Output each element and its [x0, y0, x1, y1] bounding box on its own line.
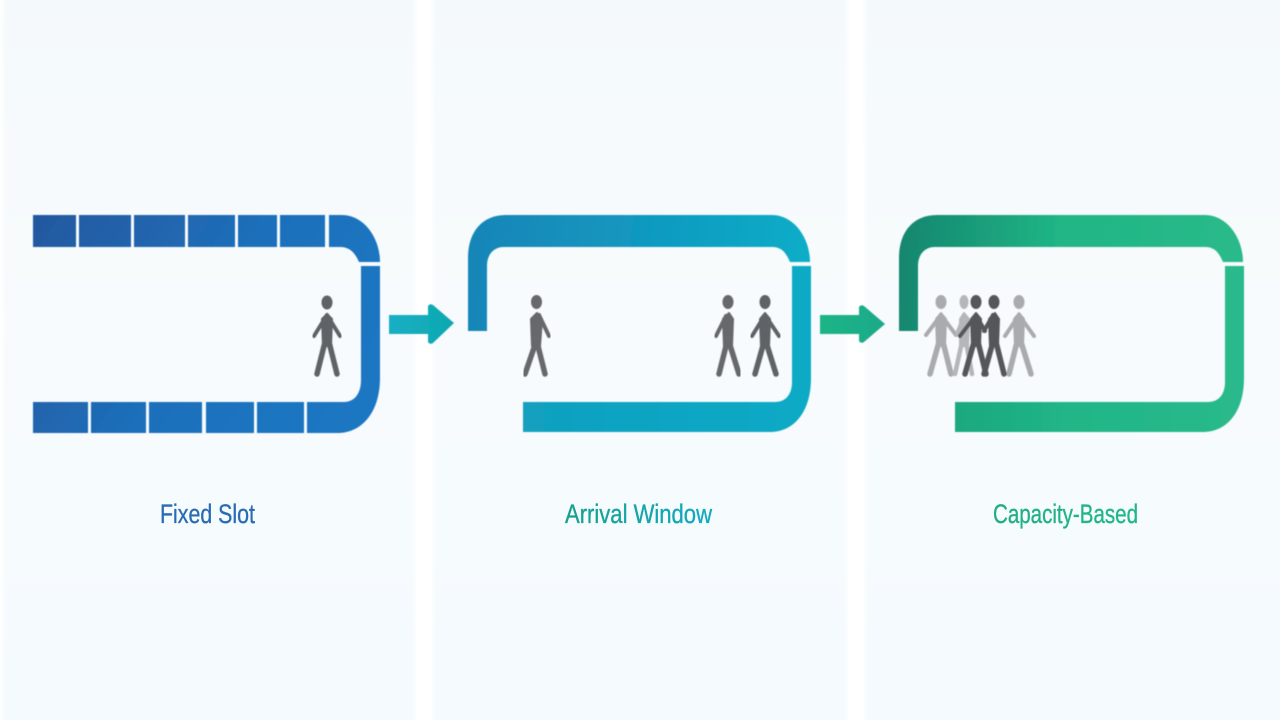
- teal lower track: [523, 266, 811, 432]
- dark person centre left: [960, 295, 986, 374]
- panel: capacity-based: [865, 0, 1280, 720]
- person waiting right: [752, 295, 779, 374]
- person waiting left: [716, 295, 739, 374]
- person in fixed slot: [314, 296, 340, 374]
- label: arrival window: Arrival Window: [565, 499, 712, 529]
- group of people: [926, 295, 1034, 374]
- person at window start: [525, 295, 549, 374]
- panel: arrival window: [433, 0, 847, 720]
- light person behind: [955, 295, 972, 374]
- dark person centre right: [984, 295, 1004, 374]
- blue top track: [33, 215, 380, 262]
- label: fixed slot: Fixed Slot: [160, 499, 255, 529]
- panel: fixed slot: [3, 0, 415, 720]
- light person far left: [926, 295, 956, 374]
- blue bottom track: [33, 266, 380, 433]
- light person far right: [1005, 295, 1034, 374]
- green upper track: [899, 215, 1243, 331]
- label: capacity-based: Capacity-Based: [993, 499, 1138, 529]
- green lower track: [955, 266, 1244, 432]
- arrow: arrival window to capacity-based: [820, 305, 885, 343]
- arrow: fixed slot to arrival window: [389, 304, 454, 344]
- teal upper track: [468, 215, 810, 331]
